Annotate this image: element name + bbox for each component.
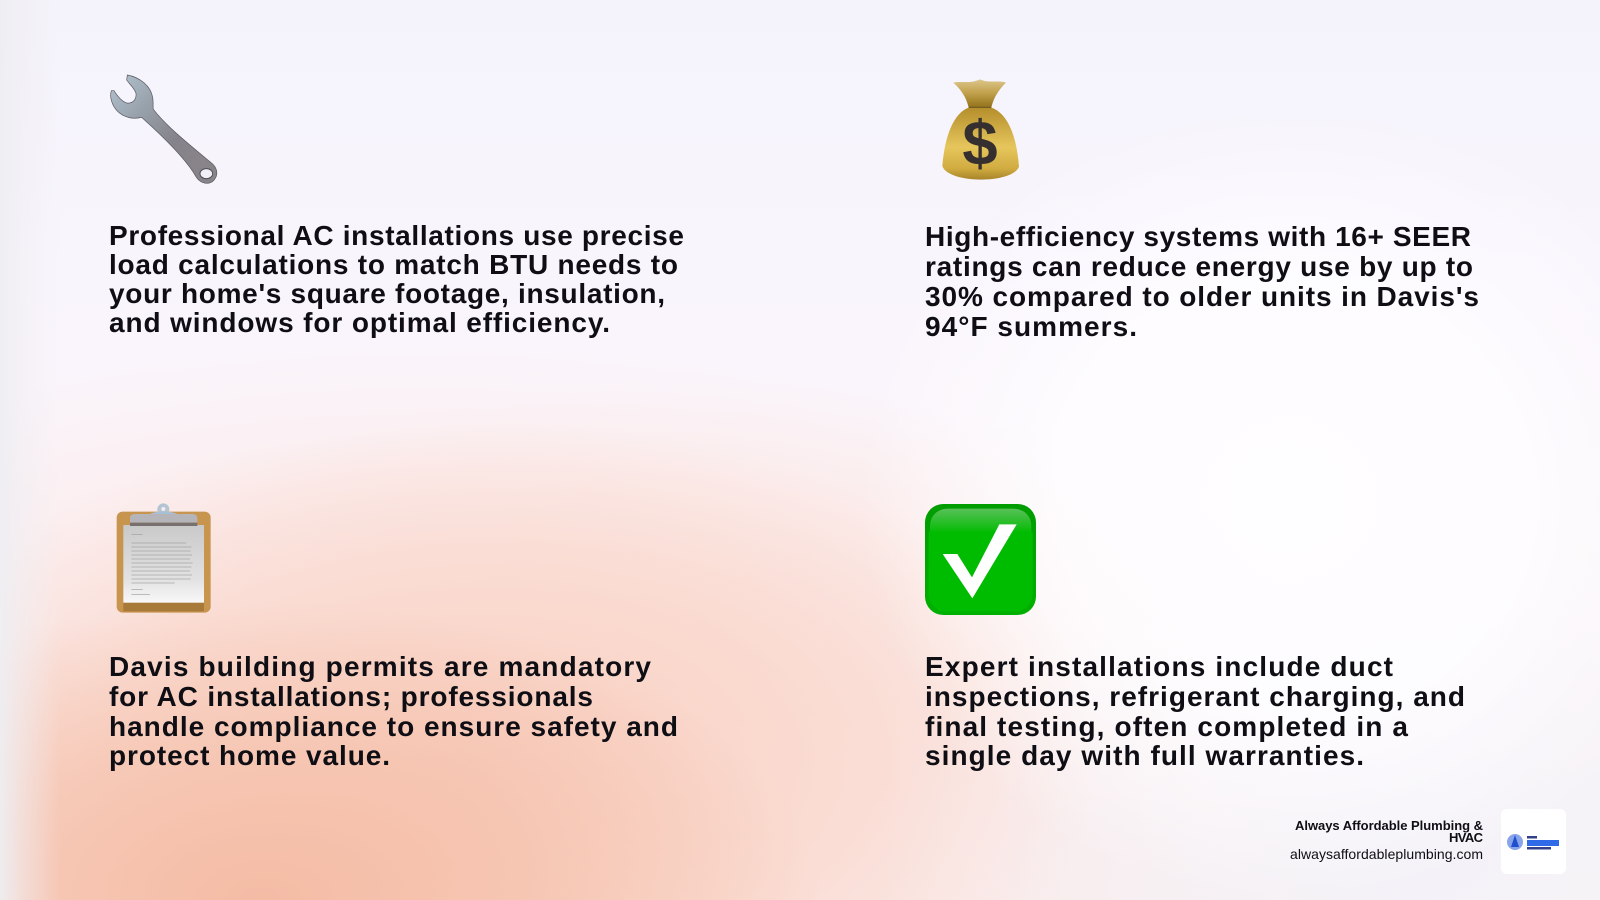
text: davis building permits: handle compliance to ensure safety and: [109, 711, 678, 742]
text: davis building permits: [109, 651, 678, 771]
text: expert installations: [925, 651, 1465, 771]
text: high efficiency systems: 94°F summers.: [925, 311, 1137, 342]
text: expert installations: Expert installations include duct: [925, 651, 1393, 682]
text: davis building permits: protect home value.: [109, 740, 390, 771]
icon: clipboard: [117, 503, 211, 613]
text: professional load calculations: and windows for optimal efficiency.: [109, 307, 610, 338]
text: professional load calculations: load calculations to match BTU needs to: [109, 249, 678, 280]
icon: green check mark: [925, 504, 1036, 615]
footer: company name and website: alwaysaffordableplumbing.com: [1290, 846, 1483, 862]
text: high efficiency systems: 30% compared to older units in Davis's: [925, 281, 1479, 312]
footer: company name and website: Always Affordable Plumbing &: [1295, 818, 1483, 833]
text: expert installations: final testing, often completed in a: [925, 711, 1408, 742]
icon: wrench: [111, 75, 217, 183]
text: high efficiency systems: High-efficiency systems with 16+ SEER: [925, 221, 1471, 252]
logo: company badge: [1501, 809, 1566, 874]
text: davis building permits: for AC installations; professionals: [109, 681, 593, 712]
text: professional load calculations: your home's square footage, insulation,: [109, 278, 665, 309]
text: davis building permits: Davis building permits are mandatory: [109, 651, 651, 682]
icon: money bag: $: [962, 109, 998, 179]
icon: money bag: [942, 79, 1019, 180]
footer: company name and website: [1290, 818, 1484, 862]
text: high efficiency systems: ratings can reduce energy use by up to: [925, 251, 1473, 282]
text: professional load calculations: Professional AC installations use precise: [109, 220, 684, 251]
text: expert installations: single day with full warranties.: [925, 740, 1364, 771]
text: professional load calculations: [109, 220, 684, 338]
text: expert installations: inspections, refrigerant charging, and: [925, 681, 1465, 712]
text: high efficiency systems: [925, 221, 1479, 342]
footer: company name and website: HVAC: [1449, 830, 1484, 845]
